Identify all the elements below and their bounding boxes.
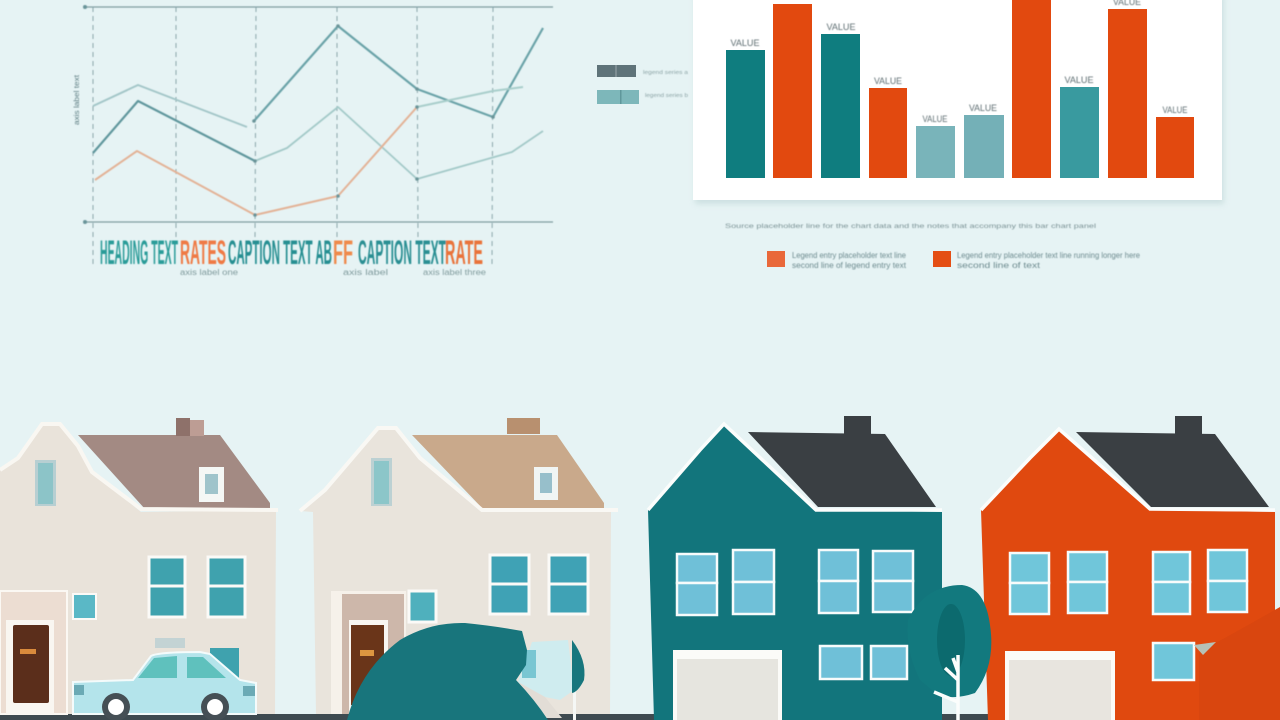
- bar chart legend: Legend entry placeholder text line running longer here: [957, 251, 1141, 260]
- chart markers: [83, 5, 495, 224]
- garage door: [1005, 651, 1115, 720]
- chimney: [176, 418, 204, 436]
- bar chart legend: second line of text: [957, 261, 1041, 270]
- dormer window: [534, 467, 558, 500]
- chart caption: small labels: [180, 268, 487, 277]
- bar chart legend: [767, 251, 1141, 270]
- bar value labels: VALUE: [1162, 105, 1188, 115]
- upper windows: [490, 555, 588, 614]
- ground strip: [0, 714, 1280, 720]
- line chart legend: [597, 65, 688, 104]
- lower window behind car: [210, 648, 239, 684]
- porch: [331, 591, 406, 714]
- roof: [412, 435, 604, 510]
- bar chart legend: second line of legend entry text: [792, 261, 907, 270]
- wall: [300, 430, 611, 714]
- wall: [981, 430, 1275, 720]
- dormer window: [199, 467, 224, 502]
- windows: [677, 550, 913, 679]
- porch: [0, 591, 67, 714]
- door: [351, 625, 384, 705]
- bar value labels: VALUE: [922, 114, 948, 124]
- bar value labels: VALUE: [826, 22, 856, 32]
- bush: [347, 623, 548, 720]
- bar value labels: VALUE: [969, 103, 997, 113]
- y axis label: axis label text: [74, 75, 81, 125]
- bar value labels: VALUE: [874, 76, 902, 86]
- house 3: teal with dark roof: [648, 416, 942, 720]
- series: teal line, lower: [93, 101, 543, 179]
- bar value labels: VALUE: [730, 38, 760, 48]
- bar chart legend: Legend entry placeholder text line: [792, 251, 907, 260]
- chimney: [844, 416, 871, 435]
- chimney: [507, 418, 540, 434]
- mailbox: [518, 640, 584, 720]
- chart caption: coloured heading: CAPTION TEXT: [358, 234, 446, 272]
- foreground flag tip: [1194, 642, 1216, 655]
- small window: [73, 594, 96, 619]
- line chart legend: legend series b: [645, 93, 688, 99]
- series: teal line, upper: [93, 26, 543, 127]
- gable window: [371, 458, 392, 506]
- series: orange line: [95, 87, 523, 215]
- chart caption: coloured heading: [100, 234, 483, 272]
- chart caption: coloured heading: HEADING TEXT: [100, 234, 178, 272]
- tree: [908, 585, 991, 720]
- bar value labels: [730, 0, 1188, 124]
- small window: [409, 591, 436, 622]
- chart caption: coloured heading: CAPTION TEXT AB: [228, 234, 332, 272]
- chart caption: coloured heading: RATES: [180, 234, 226, 272]
- gable window: [35, 460, 56, 506]
- chart caption: small labels: axis label: [343, 268, 388, 277]
- bars: [726, 0, 1194, 178]
- foreground orange shape: [1199, 607, 1280, 720]
- upper windows: [149, 557, 245, 617]
- wall: [0, 424, 276, 714]
- chart caption: small labels: axis label one: [180, 268, 239, 277]
- source note: Source placeholder line for the chart data and the notes that accompany this bar chart panel: [725, 223, 1097, 230]
- house 2: beige with tan roof: [300, 418, 618, 714]
- windows: [1010, 550, 1247, 680]
- house 1: beige with brown roof: [0, 418, 278, 714]
- chart caption: small labels: axis label three: [423, 268, 487, 277]
- door: [13, 625, 49, 703]
- house 4: orange with dark roof: [981, 416, 1275, 720]
- chart caption: coloured heading: FF: [333, 234, 353, 272]
- roof: [78, 435, 270, 509]
- chimney: [1175, 416, 1202, 435]
- roof: [748, 432, 936, 507]
- panel: bar chart: [693, 0, 1224, 204]
- line chart: [74, 5, 553, 266]
- wall: [648, 424, 942, 720]
- garage door: [673, 650, 782, 720]
- car: [73, 638, 256, 720]
- roof: [1076, 432, 1269, 507]
- text: RATE: [445, 234, 483, 272]
- line chart legend: legend series a: [643, 70, 688, 76]
- bar value labels: VALUE: [1064, 75, 1094, 85]
